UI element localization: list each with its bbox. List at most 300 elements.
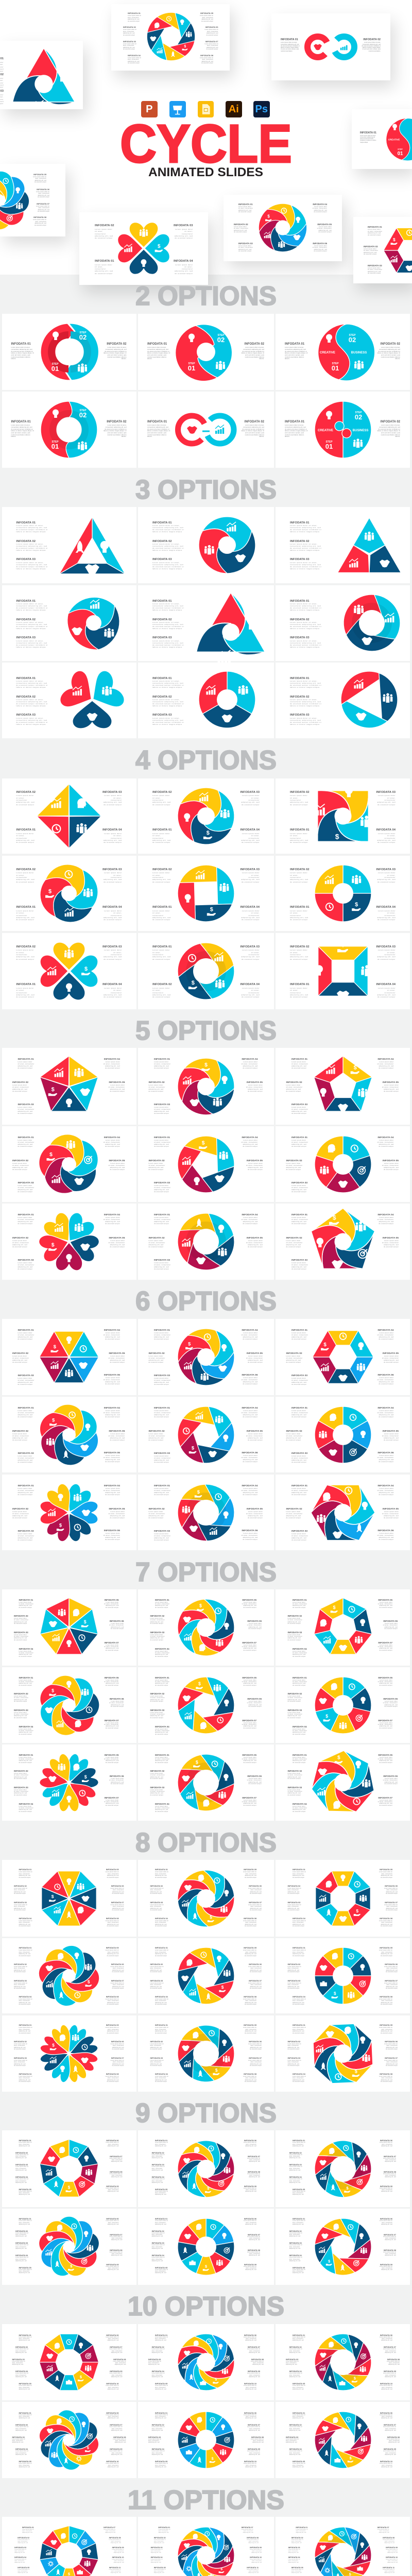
labels (138, 2130, 274, 2207)
labels: INFODATA 03 (287, 1901, 300, 1903)
panel: 9 options donut (138, 2209, 274, 2285)
labels: Lorem ipsum dolor sit amet, consectetur adipiscing elit, sed (383, 2539, 394, 2544)
chart (343, 1628, 348, 1633)
labels: Lorem ipsum dolor sit amet, consectetur adipiscing elit, sed do eiusmod tempor (155, 2076, 168, 2082)
labels: Lorem ipsum dolor sit amet, consectetur adipiscing elit, sed do eiusmod tempor (19, 1728, 33, 1735)
labels: Lorem ipsum dolor sit amet, consectetur adipiscing elit, sed (383, 2569, 394, 2573)
labels: Lorem ipsum dolor sit amet, consectetur adipiscing elit, sed do eiusmod tempor (104, 910, 122, 921)
labels: Lorem ipsum dolor sit amet, consectetur adipiscing elit, sed do eiusmod tempor (109, 1701, 124, 1707)
labels: Lorem ipsum dolor sit amet, consectetur adipiscing elit, sed do eiusmod tempor (241, 794, 260, 806)
labels (2, 2517, 136, 2576)
labels (2, 2130, 136, 2207)
chart (69, 1628, 74, 1633)
labels (0, 57, 4, 105)
labels: Lorem ipsum dolor sit amet, consectetur adipiscing elit, sed (288, 2549, 300, 2553)
labels: INFODATA 04 (104, 1214, 120, 1216)
labels: INFODATA 03 (14, 2057, 27, 2059)
labels: Lorem ipsum dolor sit amet, consectetur adipiscing elit, sed do eiusmod tempor (291, 1216, 308, 1225)
labels: Lorem ipsum dolor sit amet, consectetur adipiscing elit, sed (291, 2569, 303, 2573)
labels (138, 778, 274, 854)
labels: Lorem ipsum dolor sit amet, consectetur adipiscing elit, sed do eiusmod tempor (377, 1216, 393, 1225)
labels: INFODATA 03 (14, 1901, 27, 1903)
labels (138, 1319, 274, 1395)
labels: Lorem ipsum dolor sit amet, consectetur adipiscing elit, sed do eiusmod tempor (154, 1455, 170, 1463)
heading: 5 options: 5 OPTIONS (135, 1016, 277, 1046)
labels (2, 1204, 136, 1280)
labels: INFODATA 04 (102, 983, 122, 986)
labels: INFODATA 06 (111, 1963, 124, 1965)
labels: Lorem ipsum dolor sit amet, consectetur adipiscing elit, sed do eiusmod tempor (291, 1377, 308, 1385)
labels: INFODATA 02 (150, 1770, 164, 1772)
panel: 9 options ring (2, 2130, 136, 2207)
labels: INFODATA 04 (289, 2448, 302, 2450)
labels: INFODATA 11 (109, 2567, 121, 2569)
labels: INFODATA 01 (18, 1329, 34, 1331)
labels: Lorem ipsum dolor sit amet, consectetur adipiscing elit, sed (15, 2427, 28, 2431)
chart (69, 1164, 74, 1170)
labels: INFODATA 03 (152, 714, 172, 717)
labels: INFODATA 05 (317, 223, 332, 226)
labels: Lorem ipsum dolor sit amet, consectetur adipiscing elit, sed do eiusmod tempor (200, 57, 213, 64)
labels: INFODATA 01 (16, 906, 36, 909)
labels: Lorem ipsum dolor sit amet, consectetur adipiscing elit, sed do eiusmod tempor (14, 1789, 28, 1796)
labels: Lorem ipsum dolor sit amet, consectetur adipiscing elit, sed do eiusmod tempor (291, 1139, 308, 1147)
labels: Lorem ipsum dolor sit amet, consectetur adipiscing elit, sed do eiusmod tempor (242, 1645, 256, 1651)
panel: 2 options arrow donut (2, 314, 136, 390)
labels: Lorem ipsum dolor sit amet, consectetur adipiscing elit, sed (154, 2569, 166, 2573)
chart (372, 623, 377, 628)
row: 9 options (0, 2130, 412, 2207)
labels: INFODATA 07 (249, 1979, 262, 1981)
labels: INFODATA 05 (293, 2267, 305, 2269)
labels: Lorem ipsum dolor sit amet, consectetur adipiscing elit, sed do eiusmod tempor (123, 29, 136, 36)
labels (147, 342, 264, 360)
labels: Lorem ipsum dolor sit amet, consectetur adipiscing elit, sed do eiusmod tempor (293, 1680, 307, 1686)
labels: Lorem ipsum dolor sit amet, consectetur adipiscing elit, sed do eiusmod tempor (154, 1377, 170, 1385)
icon: Photoshop: Ps (255, 104, 268, 115)
labels: INFODATA 06 (385, 1885, 398, 1887)
panel: 8 options octagon (2, 1860, 136, 1937)
row: 4 options (0, 778, 412, 854)
labels: INFODATA 03 (14, 2546, 26, 2548)
labels: Lorem ipsum dolor sit amet, consectetur adipiscing elit, sed do eiusmod tempor incididunt ut labore et dolore magna aliqua. (152, 680, 184, 688)
labels: Lorem ipsum dolor sit amet, consectetur adipiscing elit, sed do eiusmod tempor (155, 1757, 169, 1764)
labels: Lorem ipsum dolor sit amet, consectetur adipiscing elit, sed do eiusmod tempor (155, 1871, 168, 1878)
labels: Lorem ipsum dolor sit amet, consectetur adipiscing elit, sed do eiusmod tempor (377, 1532, 393, 1540)
labels: Lorem ipsum dolor sit amet, consectetur adipiscing elit, sed do eiusmod tempor (110, 1888, 124, 1894)
panel: 2 options curved donut: 02 (79, 411, 87, 419)
labels: Lorem ipsum dolor sit amet, consectetur adipiscing elit, sed (289, 2245, 302, 2249)
labels: INFODATA 04 (240, 906, 260, 909)
chart (199, 517, 255, 573)
labels: Lorem ipsum dolor sit amet, consectetur adipiscing elit, sed do eiusmod tempor (18, 1106, 35, 1114)
labels: INFODATA 02 (286, 1159, 302, 1162)
row: 3 options (0, 663, 412, 738)
labels: INFODATA 02 (16, 790, 36, 793)
labels: Lorem ipsum dolor sit amet, consectetur adipiscing elit, sed do eiusmod tempor (242, 1680, 256, 1686)
labels: Lorem ipsum dolor sit amet, consectetur adipiscing elit, sed do eiusmod tempor incididunt ut labore et dolore magna aliqua. Ut enim ad minim veniam, quis nostrud exercitation ullamco laboris. (242, 424, 264, 437)
chart (315, 402, 371, 457)
panel: 7 options curved donut (138, 1744, 274, 1821)
labels: Lorem ipsum dolor sit amet, consectetur adipiscing elit, sed do eiusmod tempor (19, 1920, 32, 1927)
labels: INFODATA 01 (19, 2140, 31, 2142)
labels: INFODATA 03 (287, 1708, 302, 1711)
labels: Lorem ipsum dolor sit amet, consectetur adipiscing elit, sed do eiusmod tempor (377, 1487, 393, 1496)
labels: Lorem ipsum dolor sit amet, consectetur adipiscing elit, sed do eiusmod tempor incididunt ut labore et dolore magna aliqua. Ut enim ad minim veniam, quis nostrud exercitation ullamco laboris. (147, 424, 170, 437)
labels: Lorem ipsum dolor sit amet, consectetur adipiscing elit, sed do eiusmod tempor (377, 910, 396, 921)
heading: 10 options: 10 OPTIONS (128, 2292, 284, 2321)
labels: Lorem ipsum dolor sit amet, consectetur adipiscing elit, sed do eiusmod tempor (247, 1701, 262, 1707)
chart (343, 1086, 348, 1091)
labels (33, 173, 49, 226)
chart (69, 1357, 74, 1362)
labels: INFODATA 02 (291, 2537, 303, 2539)
labels: INFODATA 06 (380, 2218, 392, 2220)
labels: INFODATA 11 (247, 2567, 259, 2569)
labels: INFODATA 09 (384, 2448, 396, 2450)
labels: Lorem ipsum dolor sit amet, consectetur adipiscing elit, sed do eiusmod tempor (379, 1950, 392, 1957)
labels: INFODATA 02 (148, 1236, 165, 1240)
labels: Lorem ipsum dolor sit amet, consectetur adipiscing elit, sed do eiusmod tempor (382, 1433, 399, 1441)
labels: Lorem ipsum dolor sit amet, consectetur adipiscing elit, sed (289, 2349, 302, 2353)
labels: INFODATA 06 (104, 1452, 120, 1454)
labels: INFODATA 06 (106, 2218, 118, 2220)
panel: 7 options flower (2, 1744, 136, 1821)
labels: INFODATA 02 (287, 1963, 300, 1965)
labels: INFODATA 02 (150, 1615, 164, 1617)
labels (2, 663, 136, 738)
labels: INFODATA 04 (15, 2255, 28, 2257)
labels: INFODATA 01 (293, 2412, 305, 2414)
labels: Lorem ipsum dolor sit amet, consectetur adipiscing elit, sed do eiusmod tempor (150, 1966, 164, 1973)
labels (360, 131, 376, 143)
chart (227, 700, 232, 705)
labels: Lorem ipsum dolor sit amet, consectetur adipiscing elit, sed do eiusmod tempor (148, 1355, 165, 1363)
labels: INFODATA 06 (249, 2040, 262, 2042)
labels: INFODATA 03 (376, 790, 396, 793)
labels: Lorem ipsum dolor sit amet, consectetur adipiscing elit, sed do eiusmod tempor (286, 1162, 303, 1171)
labels: Lorem ipsum dolor sit amet, consectetur adipiscing elit, sed do eiusmod tempor (104, 794, 122, 806)
labels: Lorem ipsum dolor sit amet, consectetur adipiscing elit, sed do eiusmod tempor (19, 1871, 32, 1878)
labels: Lorem ipsum dolor sit amet, consectetur adipiscing elit, sed (19, 2142, 32, 2147)
labels: INFODATA 05 (109, 1159, 125, 1162)
labels: INFODATA 09 (106, 2264, 118, 2266)
labels: Lorem ipsum dolor sit amet, consectetur adipiscing elit, sed do eiusmod tempor (243, 1871, 256, 1878)
labels: Lorem ipsum dolor sit amet, consectetur adipiscing elit, sed do eiusmod tempor (154, 1487, 170, 1496)
chart (69, 2440, 74, 2445)
labels: Lorem ipsum dolor sit amet, consectetur adipiscing elit, sed do eiusmod tempor (313, 206, 327, 213)
labels: Lorem ipsum dolor sit amet, consectetur adipiscing elit, sed do eiusmod tempor (155, 1602, 169, 1608)
chart (69, 893, 74, 899)
labels: Lorem ipsum dolor sit amet, consectetur adipiscing elit, sed (154, 2539, 166, 2544)
labels: Lorem ipsum dolor sit amet, consectetur adipiscing elit, sed (152, 2257, 165, 2262)
labels: Lorem ipsum dolor sit amet, consectetur adipiscing elit, sed do eiusmod tempor (104, 1216, 120, 1225)
labels: Lorem ipsum dolor sit amet, consectetur adipiscing elit, sed do eiusmod tempor (287, 1904, 301, 1911)
labels: INFODATA 01 (291, 1137, 307, 1139)
panel: 2 options yin yang: BUSINESS (351, 351, 367, 354)
labels: INFODATA 01 (158, 2527, 170, 2529)
labels: INFODATA 01 (152, 677, 172, 680)
labels: INFODATA 08 (110, 2249, 123, 2251)
labels: Lorem ipsum dolor sit amet, consectetur adipiscing elit, sed do eiusmod tempor (246, 1084, 263, 1092)
labels: Lorem ipsum dolor sit amet, consectetur adipiscing elit, sed do eiusmod tempor (241, 1487, 258, 1496)
slide card: yin yang: STEP (398, 148, 403, 150)
labels: INFODATA 02 (287, 2040, 300, 2042)
labels: INFODATA 02 (287, 1770, 302, 1772)
labels (276, 1126, 410, 1202)
labels: Lorem ipsum dolor sit amet, consectetur adipiscing elit, sed (19, 2337, 32, 2341)
labels: INFODATA 07 (384, 2234, 396, 2236)
labels: INFODATA 09 (110, 2448, 123, 2450)
chart (69, 2362, 74, 2367)
panel: 4 options donut (276, 856, 410, 931)
labels: INFODATA 04 (289, 2255, 302, 2257)
chart (13, 49, 74, 104)
panel: 11 options ring (2, 2517, 136, 2576)
labels: INFODATA 02 (16, 868, 36, 871)
labels: Lorem ipsum dolor sit amet, consectetur adipiscing elit, sed do eiusmod tempor (293, 1806, 307, 1812)
labels: INFODATA 05 (155, 2189, 167, 2191)
chart (343, 2169, 348, 2174)
labels: Lorem ipsum dolor sit amet, consectetur adipiscing elit, sed (12, 2439, 25, 2443)
labels: Lorem ipsum dolor sit amet, consectetur adipiscing elit, sed (383, 2451, 396, 2455)
slide card: 4-part heart flower (79, 212, 208, 285)
labels: INFODATA 04 (293, 1917, 305, 1920)
labels: INFODATA 09 (380, 2185, 392, 2188)
labels (2, 1475, 136, 1550)
labels: Lorem ipsum dolor sit amet, consectetur adipiscing elit, sed do eiusmod tempor (287, 1773, 302, 1780)
slide card: yin yang: 01 (397, 151, 403, 157)
labels: Lorem ipsum dolor sit amet, consectetur adipiscing elit, sed do eiusmod tempor (104, 1645, 118, 1651)
labels: INFODATA 08 (106, 2072, 118, 2075)
labels: Lorem ipsum dolor sit amet, consectetur adipiscing elit, sed (148, 2361, 161, 2365)
labels: INFODATA 04 (19, 1648, 33, 1650)
labels: Lorem ipsum dolor sit amet, consectetur adipiscing elit, sed do eiusmod tempor (123, 43, 136, 50)
labels: Lorem ipsum dolor sit amet, consectetur adipiscing elit, sed do eiusmod tempor (105, 2027, 119, 2034)
panel: 2 options puzzle: 02 (354, 413, 362, 421)
labels: INFODATA 01 (155, 2334, 167, 2336)
labels: INFODATA 10 (244, 2461, 256, 2463)
labels: INFODATA 04 (293, 1995, 305, 1998)
labels: Lorem ipsum dolor sit amet, consectetur adipiscing elit, sed (289, 2155, 302, 2159)
labels: INFODATA 06 (37, 188, 49, 191)
labels: INFODATA 01 (293, 2218, 305, 2220)
labels: INFODATA 05 (293, 2461, 305, 2463)
panel: 7 options donut (276, 1667, 410, 1743)
labels: INFODATA 04 (152, 2448, 164, 2450)
labels: INFODATA 04 (377, 1406, 393, 1410)
labels: INFODATA 01 (19, 2412, 31, 2414)
labels: INFODATA 05 (383, 1236, 399, 1240)
labels (138, 1397, 274, 1472)
labels: INFODATA 05 (380, 1946, 392, 1949)
labels: Lorem ipsum dolor sit amet, consectetur adipiscing elit, sed (155, 2221, 168, 2225)
labels: Lorem ipsum dolor sit amet, consectetur adipiscing elit, sed do eiusmod tempor (16, 833, 35, 843)
labels: Lorem ipsum dolor sit amet, consectetur adipiscing elit, sed (15, 2166, 28, 2171)
panel: 6 options aperture (138, 1397, 274, 1472)
labels: Lorem ipsum dolor sit amet, consectetur adipiscing elit, sed do eiusmod tempor (293, 1920, 306, 1927)
labels (138, 1204, 274, 1280)
labels: Lorem ipsum dolor sit amet, consectetur adipiscing elit, sed (288, 2559, 300, 2563)
chart (206, 1513, 211, 1518)
labels: Lorem ipsum dolor sit amet, consectetur adipiscing elit, sed do eiusmod tempor (104, 1377, 120, 1385)
chart (69, 1513, 74, 1518)
panel: 3 options triangle ring (2, 507, 136, 583)
labels: INFODATA 02 (152, 540, 172, 543)
labels: INFODATA 03 (18, 1452, 34, 1455)
labels: INFODATA 01 (290, 983, 310, 986)
panel: 4 options diamond (2, 778, 136, 854)
labels: INFODATA 04 (104, 1485, 120, 1487)
labels: Lorem ipsum dolor sit amet, consectetur adipiscing elit, sed do eiusmod tempor (238, 206, 253, 213)
labels: INFODATA 03 (152, 2164, 164, 2166)
labels: INFODATA 03 (150, 1901, 163, 1903)
row: 7 options (0, 1589, 412, 1666)
labels (2, 1744, 136, 1821)
labels: INFODATA 03 (152, 558, 172, 561)
labels: INFODATA 08 (106, 1995, 118, 1998)
labels: Lorem ipsum dolor sit amet, consectetur adipiscing elit, sed do eiusmod tempor (377, 1410, 393, 1418)
labels: Lorem ipsum dolor sit amet, consectetur adipiscing elit, sed do eiusmod tempor (377, 1139, 393, 1147)
labels: Lorem ipsum dolor sit amet, consectetur adipiscing elit, sed do eiusmod tempor (110, 2043, 124, 2050)
panel: 5 options swirl (138, 1048, 274, 1125)
panel: 5 options pentagon (2, 1048, 136, 1125)
labels: Lorem ipsum dolor sit amet, consectetur adipiscing elit, sed do eiusmod tempor (378, 1645, 392, 1651)
labels: INFODATA 09 (244, 2185, 256, 2188)
labels: INFODATA 01 (360, 131, 376, 134)
labels: INFODATA 07 (378, 1796, 392, 1799)
icon: PowerPoint: P (146, 104, 152, 115)
labels: INFODATA 03 (290, 714, 310, 717)
labels: Lorem ipsum dolor sit amet, consectetur adipiscing elit, sed (155, 2337, 168, 2341)
panel: 4 options leaf swirl (2, 856, 136, 931)
labels: Lorem ipsum dolor sit amet, consectetur adipiscing elit, sed do eiusmod tempor (246, 1162, 263, 1171)
labels: INFODATA 08 (248, 2249, 260, 2251)
labels: Lorem ipsum dolor sit amet, consectetur adipiscing elit, sed (151, 2559, 163, 2563)
labels: INFODATA 01 (155, 2140, 167, 2142)
labels: Lorem ipsum dolor sit amet, consectetur adipiscing elit, sed do eiusmod tempor incididunt ut labore et dolore magna aliqua. (290, 621, 321, 630)
labels: INFODATA 03 (151, 2546, 163, 2548)
slide card: 8-part aperture (111, 4, 230, 71)
labels: Lorem ipsum dolor sit amet, consectetur adipiscing elit, sed (293, 2142, 305, 2147)
labels: Lorem ipsum dolor sit amet, consectetur adipiscing elit, sed (293, 2337, 305, 2341)
labels: INFODATA 02 (107, 420, 127, 423)
icon: Keynote (169, 101, 185, 117)
labels: INFODATA 01 (19, 2334, 31, 2336)
labels: INFODATA 04 (128, 54, 141, 57)
labels (95, 224, 193, 275)
labels: INFODATA 06 (313, 242, 327, 245)
labels: Lorem ipsum dolor sit amet, consectetur adipiscing elit, sed do eiusmod tempor (110, 2060, 124, 2066)
chart (69, 2169, 74, 2174)
labels: Lorem ipsum dolor sit amet, consectetur adipiscing elit, sed (109, 2174, 123, 2178)
labels: INFODATA 02 (286, 1081, 302, 1084)
labels: INFODATA 05 (380, 2024, 392, 2026)
labels: INFODATA 07 (111, 1979, 124, 1981)
chart (206, 1242, 211, 1247)
labels: Lorem ipsum dolor sit amet, consectetur adipiscing elit, sed do eiusmod tempor (12, 1511, 29, 1519)
labels: INFODATA 02 (14, 1963, 27, 1965)
labels: Lorem ipsum dolor sit amet, consectetur adipiscing elit, sed do eiusmod tempor (150, 1888, 164, 1894)
labels: INFODATA 02 (381, 343, 400, 346)
labels: Lorem ipsum dolor sit amet, consectetur adipiscing elit, sed (286, 2439, 299, 2443)
labels: Lorem ipsum dolor sit amet, consectetur adipiscing elit, sed do eiusmod tempor (243, 1920, 256, 1927)
labels: Lorem ipsum dolor sit amet, consectetur adipiscing elit, sed do eiusmod tempor (293, 2027, 306, 2034)
labels: Lorem ipsum dolor sit amet, consectetur adipiscing elit, sed do eiusmod tempor (95, 228, 113, 239)
labels: Lorem ipsum dolor sit amet, consectetur adipiscing elit, sed (289, 2233, 302, 2237)
labels: INFODATA 05 (247, 1430, 263, 1432)
labels: INFODATA 05 (105, 1676, 118, 1679)
labels: INFODATA 01 (290, 677, 310, 680)
panel: 9 options leaf swirl (2, 2209, 136, 2285)
labels: Lorem ipsum dolor sit amet, consectetur adipiscing elit, sed (247, 2158, 260, 2162)
heading: 8 options: 8 OPTIONS (135, 1828, 277, 1858)
labels: INFODATA 06 (104, 1529, 120, 1532)
labels: INFODATA 03 (376, 945, 396, 948)
labels: INFODATA 01 (22, 2527, 34, 2529)
labels: INFODATA 02 (245, 343, 264, 346)
labels: Lorem ipsum dolor sit amet, consectetur adipiscing elit, sed do eiusmod tempor (150, 1789, 165, 1796)
labels: INFODATA 01 (293, 2334, 305, 2336)
labels: Lorem ipsum dolor sit amet, consectetur adipiscing elit, sed do eiusmod tempor (242, 1722, 256, 1729)
panel: 10 options leaf swirl (2, 2402, 136, 2478)
labels (152, 521, 184, 570)
panel: 3 options donut (138, 663, 274, 738)
chart (369, 700, 374, 705)
panel: 4 options aperture (138, 856, 274, 931)
labels: Lorem ipsum dolor sit amet, consectetur adipiscing elit, sed (293, 2269, 305, 2274)
labels: Lorem ipsum dolor sit amet, consectetur adipiscing elit, sed do eiusmod tempor (246, 1511, 263, 1519)
labels: Lorem ipsum dolor sit amet, consectetur adipiscing elit, sed do eiusmod tempor (377, 1454, 393, 1463)
labels: Lorem ipsum dolor sit amet, consectetur adipiscing elit, sed do eiusmod tempor (287, 2043, 301, 2050)
labels: INFODATA 08 (383, 2537, 394, 2539)
chart (343, 1164, 348, 1170)
chart (343, 1242, 348, 1247)
row: 7 options (0, 1667, 412, 1743)
labels: INFODATA 03 (291, 1182, 307, 1184)
chart (343, 893, 348, 899)
labels: Lorem ipsum dolor sit amet, consectetur adipiscing elit, sed (383, 2349, 396, 2353)
labels: Lorem ipsum dolor sit amet, consectetur adipiscing elit, sed do eiusmod tempor (18, 1262, 35, 1270)
labels (2, 2324, 136, 2400)
labels: INFODATA 06 (110, 1698, 124, 1700)
labels: INFODATA 05 (247, 1352, 263, 1355)
labels: Lorem ipsum dolor sit amet, consectetur adipiscing elit, sed (247, 2427, 260, 2431)
labels: Lorem ipsum dolor sit amet, consectetur adipiscing elit, sed do eiusmod tempor (36, 206, 49, 212)
labels: Lorem ipsum dolor sit amet, consectetur adipiscing elit, sed (293, 2191, 305, 2195)
chart (69, 1783, 74, 1788)
labels: Lorem ipsum dolor sit amet, consectetur adipiscing elit, sed do eiusmod tempor incididunt ut labore et dolore magna aliqua. (290, 717, 321, 725)
labels: Lorem ipsum dolor sit amet, consectetur adipiscing elit, sed do eiusmod tempor (291, 1332, 308, 1340)
panel: 5 options curved donut (138, 1204, 274, 1280)
labels: INFODATA 01 (152, 828, 172, 832)
labels: Lorem ipsum dolor sit amet, consectetur adipiscing elit, sed do eiusmod tempor (104, 949, 122, 960)
labels: INFODATA 01 (18, 1137, 34, 1139)
labels: Lorem ipsum dolor sit amet, consectetur adipiscing elit, sed do eiusmod tempor (379, 1998, 392, 2005)
labels: Lorem ipsum dolor sit amet, consectetur adipiscing elit, sed (152, 2427, 165, 2431)
labels: INFODATA 06 (110, 1620, 124, 1622)
chart (343, 1357, 348, 1362)
labels: INFODATA 06 (242, 1452, 258, 1454)
chart (41, 402, 97, 457)
labels (11, 342, 127, 360)
labels: Lorem ipsum dolor sit amet, consectetur adipiscing elit, sed do eiusmod tempor (293, 1950, 306, 1957)
panel: 8 options curved donut (138, 2015, 274, 2092)
labels: INFODATA 04 (15, 2370, 28, 2372)
labels: INFODATA 02 (16, 540, 36, 543)
labels: Lorem ipsum dolor sit amet, consectetur adipiscing elit, sed do eiusmod tempor incididunt ut labore et dolore magna aliqua. (16, 603, 48, 611)
labels: INFODATA 07 (378, 1719, 392, 1722)
